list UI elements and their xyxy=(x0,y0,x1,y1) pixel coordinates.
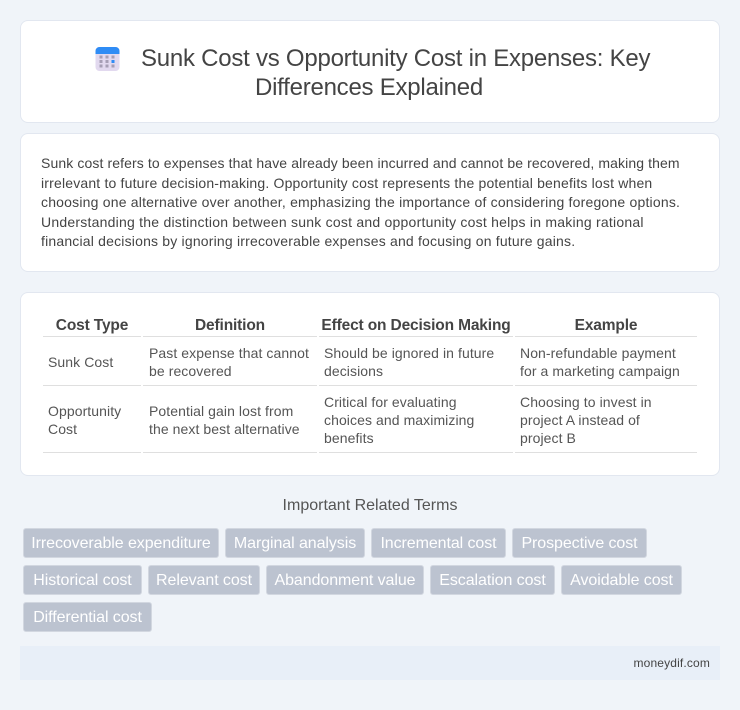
row: opportunity cost: choices and maximizing xyxy=(324,412,474,428)
text block: intro paragraph: irrelevant to future decision-making. Opportunity cost represents the potential benefits lost when xyxy=(41,175,652,191)
row: sunk cost: be recovered xyxy=(149,363,232,379)
row: sunk cost: Non-refundable payment xyxy=(520,345,676,361)
icon: calendar xyxy=(96,47,120,71)
footer xyxy=(20,646,720,680)
table headers: Definition xyxy=(195,317,265,334)
panel: intro xyxy=(20,133,720,272)
title: Sunk Cost vs Opportunity Cost in Expenses: Key xyxy=(141,45,650,72)
tags: related terms: Prospective cost xyxy=(521,535,638,552)
row: sunk cost xyxy=(48,345,680,379)
tags: related terms: Marginal analysis xyxy=(234,535,356,552)
table headers: Cost Type xyxy=(56,317,128,334)
footer source text: moneydif.com xyxy=(634,656,710,670)
table headers: Example xyxy=(575,317,637,334)
tags: related terms: Historical cost xyxy=(33,572,132,589)
tags: related terms xyxy=(23,528,682,632)
tags: related terms: Irrecoverable expenditure xyxy=(31,535,211,552)
panel: title card xyxy=(20,20,720,123)
row: opportunity cost: project B xyxy=(520,430,576,446)
tags: related terms: Avoidable cost xyxy=(570,572,673,589)
text block: intro paragraph xyxy=(41,155,680,249)
heading: related terms: Important Related Terms xyxy=(283,497,457,514)
tags: related terms: Differential cost xyxy=(33,609,142,626)
title xyxy=(141,45,650,101)
row: opportunity cost: Opportunity xyxy=(48,403,121,419)
text block: intro paragraph: financial decisions by ignoring irrecoverable expenses and focusing on future gains. xyxy=(41,233,575,249)
row: opportunity cost: Critical for evaluating xyxy=(324,394,457,410)
row: opportunity cost: project A instead of xyxy=(520,412,640,428)
text block: intro paragraph: Sunk cost refers to expenses that have already been incurred and cannot be recovered, making them xyxy=(41,155,680,171)
text block: intro paragraph: choosing one alternative over another, emphasizing the importance of considering foregone options. xyxy=(41,194,680,210)
tags: related terms: Incremental cost xyxy=(380,535,497,552)
tags: related terms: Abandonment value xyxy=(275,572,415,589)
panel: comparison table xyxy=(20,292,720,476)
table headers: Effect on Decision Making xyxy=(321,317,511,334)
row: opportunity cost: the next best alternative xyxy=(149,421,300,437)
text block: intro paragraph: Understanding the distinction between sunk cost and opportunity cost helps in making rational xyxy=(41,214,644,230)
title: Differences Explained xyxy=(255,74,483,101)
tags: related terms: Escalation cost xyxy=(439,572,546,589)
row: sunk cost: Past expense that cannot xyxy=(149,345,309,361)
tags: related terms: Relevant cost xyxy=(156,572,252,589)
row: sunk cost: decisions xyxy=(324,363,383,379)
row: opportunity cost xyxy=(48,394,652,446)
row: opportunity cost: Potential gain lost from xyxy=(149,403,293,419)
row: opportunity cost: Cost xyxy=(48,421,77,437)
row: opportunity cost: Choosing to invest in xyxy=(520,394,652,410)
row: sunk cost: Should be ignored in future xyxy=(324,345,494,361)
row: opportunity cost: benefits xyxy=(324,430,374,446)
row: sunk cost: for a marketing campaign xyxy=(520,363,680,379)
row: sunk cost: Sunk Cost xyxy=(48,354,113,370)
table headers xyxy=(56,317,637,334)
